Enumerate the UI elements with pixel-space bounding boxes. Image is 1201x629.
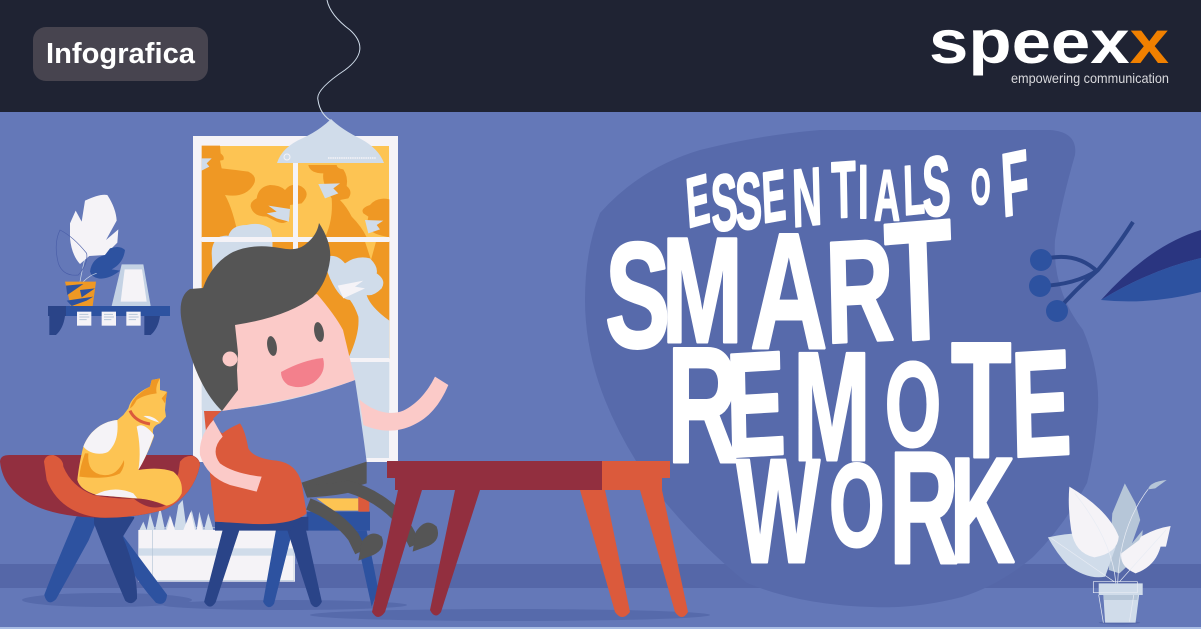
shelf brackets	[49, 316, 160, 335]
title line: Essentials of: S	[710, 158, 739, 250]
title line: Smart: S	[605, 211, 670, 379]
plant pot	[1099, 583, 1143, 595]
title line: Remote: E	[1009, 319, 1073, 490]
shelf board	[48, 306, 170, 316]
hair	[181, 223, 330, 411]
floor band	[0, 564, 1201, 588]
title backdrop blob	[585, 130, 1098, 607]
title line: Essentials of: A	[874, 155, 900, 236]
cat chair	[0, 378, 200, 602]
header bar	[0, 0, 1201, 112]
title line: Essentials of: T	[831, 146, 857, 236]
title line: Smart: T	[882, 184, 956, 379]
person's chair	[204, 411, 378, 607]
shelf plant pot	[65, 282, 96, 306]
title line: Remote: T	[951, 308, 1011, 492]
logo: speexx: speex x	[929, 8, 1169, 76]
logo: speexx: empowering communication	[1011, 70, 1169, 86]
title line: Essentials of: E	[684, 159, 712, 243]
badge: Infografica	[33, 27, 208, 81]
shelf plant: leaves	[56, 195, 125, 282]
mouth	[281, 358, 324, 387]
title line: Work: R	[889, 419, 959, 597]
lower arm	[200, 420, 262, 492]
person's head	[181, 223, 355, 411]
title line: Essentials of: I	[858, 150, 869, 234]
title line: Essentials of: N	[791, 149, 823, 245]
title line: Essentials of: F	[999, 132, 1031, 237]
window	[193, 136, 398, 462]
person at desk	[200, 377, 448, 607]
title line: Remote: E	[724, 320, 787, 489]
title line: Work: W	[736, 429, 821, 594]
legs and shoes	[302, 462, 438, 561]
eyes	[266, 335, 278, 357]
ear	[222, 352, 238, 366]
potted plant at right	[1048, 480, 1171, 624]
raised arm	[359, 377, 448, 431]
window scene: figures with masks	[202, 146, 389, 410]
bottom edge	[0, 627, 1201, 629]
planter with grass	[138, 500, 295, 582]
floor shadows	[22, 593, 710, 621]
title line: Work: K	[950, 427, 1015, 595]
badge: Infografica: Infografica	[46, 38, 196, 70]
notes	[77, 312, 141, 326]
title	[605, 132, 1073, 597]
picture frame	[112, 264, 151, 306]
title line: Essentials of: S	[921, 138, 952, 236]
torso	[213, 380, 367, 483]
table	[372, 461, 688, 617]
cat	[77, 378, 182, 508]
title line: Smart: A	[750, 200, 828, 384]
wall shelf with plant and frame	[48, 195, 170, 335]
title line: Remote: R	[667, 313, 739, 497]
title line: Smart: M	[662, 206, 743, 374]
leaf and berries at right	[1029, 222, 1201, 322]
title line: Remote: O	[885, 337, 941, 471]
person's chair front	[210, 423, 307, 524]
title line: Work: O	[829, 439, 884, 571]
title line: Remote: M	[793, 321, 871, 494]
title line: Essentials of: S	[734, 156, 763, 248]
title line: Essentials of: L	[902, 150, 926, 230]
title line: Essentials of: O	[971, 160, 990, 215]
hanging lamp	[277, 0, 384, 163]
title line: Essentials of: E	[760, 155, 788, 239]
title line: Smart: R	[824, 208, 896, 374]
